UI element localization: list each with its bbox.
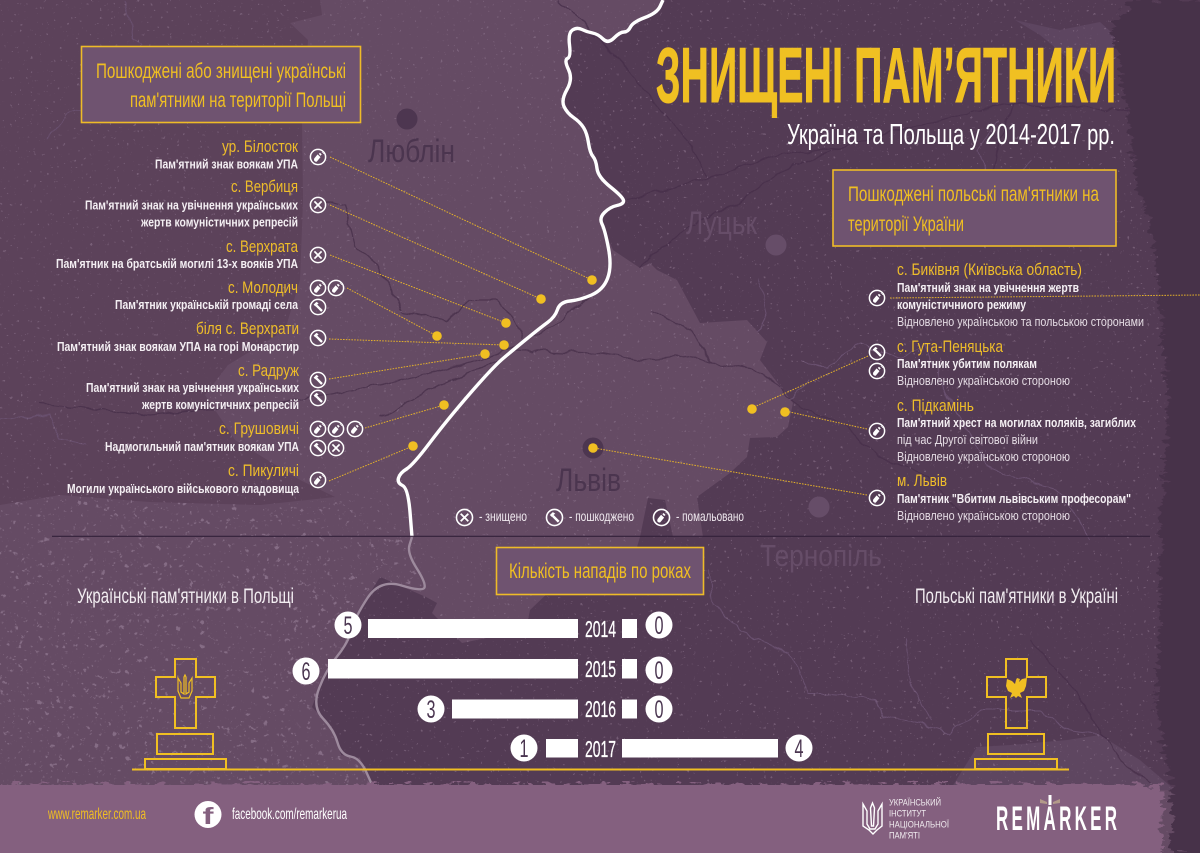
row 2016 xyxy=(418,696,672,724)
row 2015: 6 xyxy=(302,658,310,686)
icon: facebook: f xyxy=(202,803,214,829)
footer band xyxy=(0,785,1162,853)
icon: facebook xyxy=(194,801,222,829)
entry: Huta Peniatska xyxy=(869,337,1070,388)
entry: Huta Peniatska: с. Гута-Пеняцька xyxy=(897,337,1003,356)
row 2014: 0 xyxy=(654,612,664,640)
region: lighter blob lower right xyxy=(950,735,1175,790)
heading box: attacks per year: Кількість нападів по роках xyxy=(509,560,691,583)
entry: Verbytsia: с. Вербиця xyxy=(231,177,298,196)
row 2017: 2017 xyxy=(585,736,616,762)
entry: Molodych: с. Молодич xyxy=(228,278,298,297)
entry: Radruzh: с. Радруж xyxy=(238,361,299,380)
heading box: Polish territory xyxy=(82,46,360,122)
entry: Pidkamin: с. Підкамінь xyxy=(897,396,974,415)
entry: Pidkamin: Пам'ятний хрест на могилах поляків, загиблих xyxy=(897,416,1136,430)
region: darker Ukraine territory xyxy=(312,0,1200,787)
entry: Bykivnia xyxy=(869,260,1144,329)
row 2014: 2014 xyxy=(585,616,616,642)
row 2016: 0 xyxy=(654,696,664,724)
entry: near Verkhrata xyxy=(57,319,326,354)
row 2014 xyxy=(334,612,672,642)
entry: Bykivnia: с. Биківня (Київська область) xyxy=(897,260,1082,279)
entry: Verkhrata xyxy=(56,237,326,271)
entry: Lviv: Пам'ятник "Вбитим львівським професорам" xyxy=(897,492,1131,506)
row 2017 xyxy=(510,734,812,763)
institute name: УКРАЇНСЬКИЙ xyxy=(889,796,941,808)
legend xyxy=(456,508,744,526)
logo: Remarker: REMARKER xyxy=(996,800,1117,838)
heading box: Polish territory: Пошкоджені або знищені українські xyxy=(96,60,346,83)
rough right band xyxy=(1112,0,1200,853)
entry: Verkhrata: с. Верхрата xyxy=(226,237,298,256)
entry: Molodych: Пам'ятник українській громаді села xyxy=(115,298,299,312)
entry: Pykulychi xyxy=(67,461,326,496)
row 2017: 1 xyxy=(520,735,528,763)
entry: Pidkamin xyxy=(869,396,1136,464)
speckle texture lower left xyxy=(0,490,430,790)
row 2014: 5 xyxy=(344,612,352,640)
entry: Verbytsia xyxy=(85,177,326,230)
entry: Bilostok: ур. Білосток xyxy=(222,137,298,156)
entry: Molodych xyxy=(115,278,344,315)
entry: Hrushovychi xyxy=(105,419,363,456)
entry: Lviv: Відновлено українською стороною xyxy=(897,509,1070,523)
footer xyxy=(0,785,1162,853)
entry: Verkhrata: Пам'ятник на братській могилі 13-х вояків УПА xyxy=(56,257,298,271)
icon: Ukrainian cross monument xyxy=(145,659,226,769)
row 2017: 4 xyxy=(794,735,804,763)
leader lines and map points xyxy=(329,157,1200,495)
heading box: Polish territory: пам'ятники на території Польщі xyxy=(130,89,346,112)
city: Lutsk xyxy=(686,205,786,256)
entry: Bilostok xyxy=(155,137,326,172)
icon: trident xyxy=(178,675,192,698)
entry: near Verkhrata: Пам'ятний знак воякам УПА на горі Монарстир xyxy=(57,340,299,354)
entry: Radruzh: Пам'ятний знак на увічнення українських xyxy=(86,381,299,395)
heading box: Ukrainian territory: Пошкоджені польські пам'ятники на xyxy=(848,183,1099,206)
column heading: Polish monuments: Польські пам'ятники в Україні xyxy=(915,585,1118,608)
entry: Hrushovychi: Надмогильний пам'ятник воякам УПА xyxy=(105,440,299,454)
entry: Verbytsia: жертв комуністичних репресій xyxy=(140,216,298,230)
entry: Lviv: м. Львів xyxy=(897,471,947,490)
ground line xyxy=(132,768,1069,770)
heading box: Ukrainian territory xyxy=(833,170,1116,246)
entry: Lviv xyxy=(869,471,1131,523)
city: Lublin: Люблін xyxy=(368,133,455,169)
city: Lutsk: Луцьк xyxy=(686,205,758,241)
legend: - пошкоджено xyxy=(569,508,634,524)
facebook address: facebook.com/remarkerua xyxy=(232,806,347,823)
border line: Ukraine-Poland (white) xyxy=(398,0,663,537)
institute name: ПАМ'ЯТІ xyxy=(889,830,920,840)
entry: Hrushovychi: с. Грушовичі xyxy=(219,419,299,438)
entry: Bykivnia: комуністичниого режиму xyxy=(897,298,1026,312)
entry: near Verkhrata: біля с. Верхрати xyxy=(196,319,299,338)
entry: Pidkamin: під час Другої світової війни xyxy=(897,433,1038,447)
entry: Radruzh xyxy=(86,361,326,412)
title: ЗНИЩЕНІ ПАМ’ЯТНИКИ xyxy=(656,32,1116,120)
icon: institute trident xyxy=(863,803,882,834)
row 2015: 2015 xyxy=(585,656,616,682)
row 2016: 3 xyxy=(426,696,436,724)
city: Ternopil: Тернопіль xyxy=(760,538,882,573)
entry: Verbytsia: Пам'ятний знак на увічнення українських xyxy=(85,198,298,212)
website: www.remarker.com.ua xyxy=(47,806,146,823)
icon: Polish cross monument xyxy=(975,659,1057,769)
heading box: attacks per year xyxy=(496,548,704,594)
institute name: ІНСТИТУТ xyxy=(889,808,926,818)
legend: - знищено xyxy=(479,508,527,524)
region: lighter blob upper right xyxy=(1015,20,1120,78)
entry: Bykivnia: Пам'ятний знак на увічнення жертв xyxy=(897,281,1079,295)
panel: monuments in Poland xyxy=(56,137,363,496)
border line: continuation (grey) xyxy=(316,537,425,787)
heading box: Ukrainian territory: території України xyxy=(848,213,964,236)
entry: Radruzh: жертв комуністичних репресій xyxy=(141,398,299,412)
institute name xyxy=(889,796,949,840)
icon: eagle xyxy=(1006,678,1027,698)
entry: Pykulychi: Могили українського військового кладовища xyxy=(67,482,300,496)
entry: Pidkamin: Відновлено українською стороною xyxy=(897,450,1070,464)
row 2015: 0 xyxy=(654,657,664,685)
city: Lviv xyxy=(556,438,621,498)
entry: Huta Peniatska: Відновлено українською стороною xyxy=(897,374,1070,388)
bar chart: attacks per year xyxy=(292,612,812,763)
city: Lviv: Львів xyxy=(556,462,621,498)
region: darker western Poland xyxy=(0,0,335,505)
panel: monuments in Ukraine xyxy=(869,260,1144,523)
entry: Pykulychi: с. Пикуличі xyxy=(228,461,299,480)
city: Lublin xyxy=(368,108,455,169)
column heading: Ukrainian monuments: Українські пам'ятники в Польщі xyxy=(77,585,294,608)
entry: Bykivnia: Відновлено українською та польською сторонами xyxy=(897,315,1144,329)
legend: - помальовано xyxy=(676,508,744,524)
city: Ternopil xyxy=(760,496,882,573)
entry: Huta Peniatska: Пам'ятник убитим полякам xyxy=(897,357,1037,371)
row 2016: 2016 xyxy=(585,696,616,722)
institute name: НАЦІОНАЛЬНОЇ xyxy=(889,820,949,830)
row 2015 xyxy=(292,656,672,686)
entry: Bilostok: Пам'ятний знак воякам УПА xyxy=(155,158,298,172)
